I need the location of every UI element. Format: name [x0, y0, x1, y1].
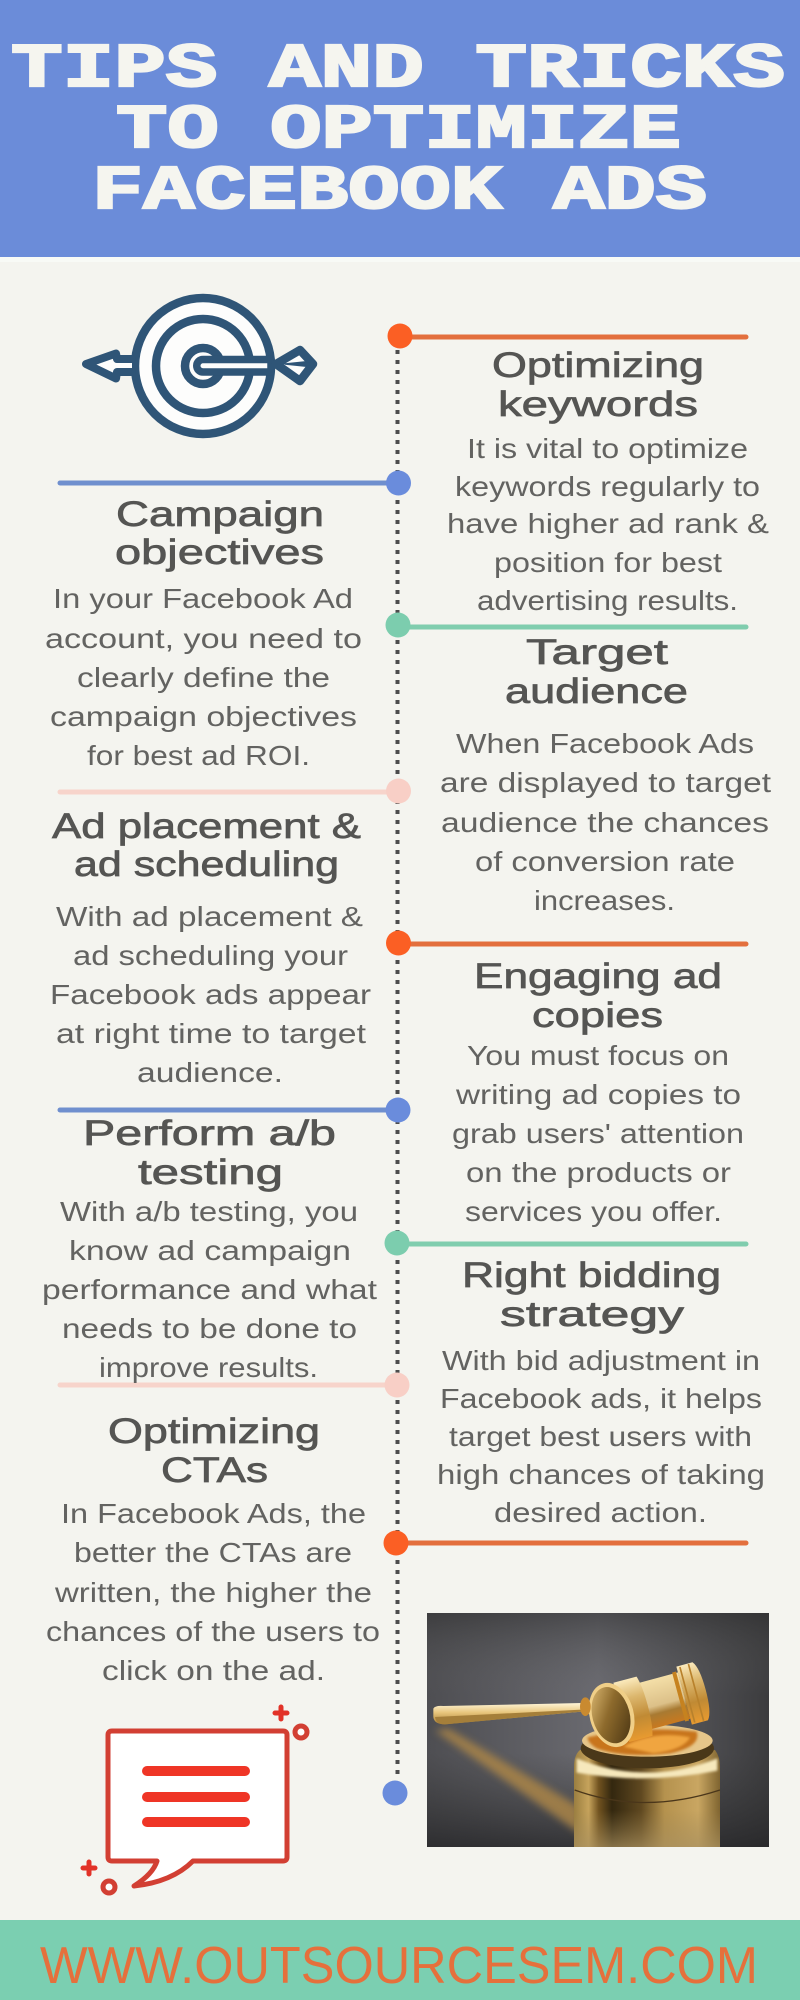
- heading: right bidding strategy: strategy: [500, 1295, 685, 1334]
- panel: right bidding strategy: [437, 1256, 765, 1528]
- text: optimizing CTAs: In Facebook Ads, the: [61, 1498, 366, 1529]
- text: right bidding strategy: [437, 1345, 765, 1528]
- text: perform a/b testing: needs to be done to: [62, 1313, 357, 1344]
- text: ad placement and scheduling: ad scheduling your: [73, 940, 348, 971]
- text: optimizing CTAs: better the CTAs are: [74, 1537, 352, 1568]
- text: campaign objectives: account, you need to: [45, 623, 362, 654]
- heading: ad placement and scheduling: ad scheduling: [74, 845, 339, 884]
- text: campaign objectives: [45, 583, 362, 771]
- heading: ad placement and scheduling: [52, 807, 361, 884]
- text: target audience: When Facebook Ads: [456, 728, 754, 759]
- title: TO OPTIMIZE: [116, 95, 681, 166]
- heading: right bidding strategy: Right bidding: [462, 1256, 721, 1295]
- text: campaign objectives: clearly define the: [77, 662, 330, 693]
- heading: optimizing CTAs: Optimizing: [108, 1412, 320, 1451]
- heading: engaging ad copies: copies: [532, 996, 663, 1035]
- text: right bidding strategy: Facebook ads, it helps: [440, 1383, 762, 1414]
- text: ad placement and scheduling: Facebook ads appear: [50, 979, 371, 1010]
- text: perform a/b testing: [42, 1196, 377, 1383]
- heading: optimizing keywords: [492, 346, 704, 424]
- heading: optimizing keywords: keywords: [498, 385, 698, 424]
- title: [11, 34, 785, 227]
- text: target audience: increases.: [534, 885, 675, 916]
- text: perform a/b testing: With a/b testing, you: [60, 1196, 358, 1227]
- icon: target with arrow: [86, 298, 314, 434]
- panel: target audience: [440, 633, 771, 916]
- panel: ad placement and scheduling: [50, 807, 371, 1088]
- text: target audience: audience the chances: [441, 807, 769, 838]
- text: engaging ad copies: You must focus on: [467, 1040, 729, 1071]
- text: optimizing CTAs: chances of the users to: [46, 1616, 380, 1647]
- text: target audience: of conversion rate: [475, 846, 735, 877]
- footer url: WWW.OUTSOURCESEM.COM: [40, 1937, 758, 1995]
- panel: campaign objectives: [45, 495, 362, 771]
- text: campaign objectives: for best ad ROI.: [87, 740, 310, 771]
- text: optimizing CTAs: [46, 1498, 380, 1686]
- text: target audience: are displayed to target: [440, 767, 771, 798]
- footer banner: [0, 1920, 800, 2000]
- text: right bidding strategy: With bid adjustment in: [442, 1345, 760, 1376]
- panel: engaging ad copies: [452, 957, 744, 1227]
- text: campaign objectives: campaign objectives: [50, 701, 357, 732]
- text: engaging ad copies: writing ad copies to: [455, 1079, 741, 1110]
- heading: campaign objectives: objectives: [115, 533, 324, 572]
- text: campaign objectives: In your Facebook Ad: [53, 583, 353, 614]
- text: engaging ad copies: grab users' attention: [452, 1118, 744, 1149]
- text: optimizing keywords: keywords regularly to: [455, 471, 760, 502]
- text: ad placement and scheduling: audience.: [137, 1057, 283, 1088]
- heading: target audience: audience: [505, 672, 688, 711]
- heading: perform a/b testing: [83, 1114, 336, 1192]
- heading: target audience: [505, 633, 688, 711]
- panel: perform a/b testing: [42, 1114, 377, 1383]
- heading: perform a/b testing: Perform a/b: [83, 1114, 336, 1153]
- text: perform a/b testing: performance and what: [42, 1274, 377, 1305]
- heading: campaign objectives: Campaign: [116, 495, 324, 534]
- heading: ad placement and scheduling: Ad placement &: [52, 807, 361, 846]
- timeline: dotted spine with connector lines and dots: [60, 324, 746, 1806]
- text: right bidding strategy: target best users with: [449, 1421, 752, 1452]
- text: engaging ad copies: services you offer.: [465, 1196, 722, 1227]
- heading: campaign objectives: [115, 495, 324, 572]
- heading: optimizing keywords: Optimizing: [492, 346, 704, 385]
- text: perform a/b testing: know ad campaign: [69, 1235, 351, 1266]
- text: optimizing CTAs: written, the higher the: [54, 1577, 372, 1608]
- text: optimizing keywords: position for best: [494, 547, 722, 578]
- text: engaging ad copies: [452, 1040, 744, 1227]
- text: ad placement and scheduling: [50, 901, 371, 1088]
- text: optimizing CTAs: click on the ad.: [102, 1655, 325, 1686]
- text: optimizing keywords: [447, 433, 769, 616]
- text: perform a/b testing: improve results.: [99, 1352, 318, 1383]
- panel: optimizing CTAs: [46, 1412, 380, 1686]
- text: optimizing keywords: advertising results.: [477, 585, 738, 616]
- heading: optimizing CTAs: CTAs: [161, 1451, 268, 1490]
- heading: optimizing CTAs: [108, 1412, 320, 1490]
- heading: engaging ad copies: [474, 957, 722, 1035]
- text: target audience: [440, 728, 771, 916]
- text: ad placement and scheduling: With ad placement &: [56, 901, 363, 932]
- text: right bidding strategy: high chances of taking: [437, 1459, 765, 1490]
- title: FACEBOOK ADS: [92, 156, 707, 227]
- heading: right bidding strategy: [462, 1256, 721, 1334]
- heading: engaging ad copies: Engaging ad: [474, 957, 722, 996]
- panel: optimizing keywords: [447, 346, 769, 616]
- photo: golden gavel: [427, 1613, 769, 1847]
- text: optimizing keywords: It is vital to optimize: [467, 433, 748, 464]
- heading: target audience: Target: [526, 633, 668, 672]
- heading: perform a/b testing: testing: [138, 1153, 283, 1192]
- title banner: [0, 0, 800, 262]
- text: right bidding strategy: desired action.: [494, 1497, 707, 1528]
- icon: speech bubble: [83, 1707, 307, 1893]
- text: engaging ad copies: on the products or: [466, 1157, 731, 1188]
- text: optimizing keywords: have higher ad rank &: [447, 508, 769, 539]
- title: TIPS AND TRICKS: [11, 34, 785, 105]
- text: ad placement and scheduling: at right time to target: [56, 1018, 366, 1049]
